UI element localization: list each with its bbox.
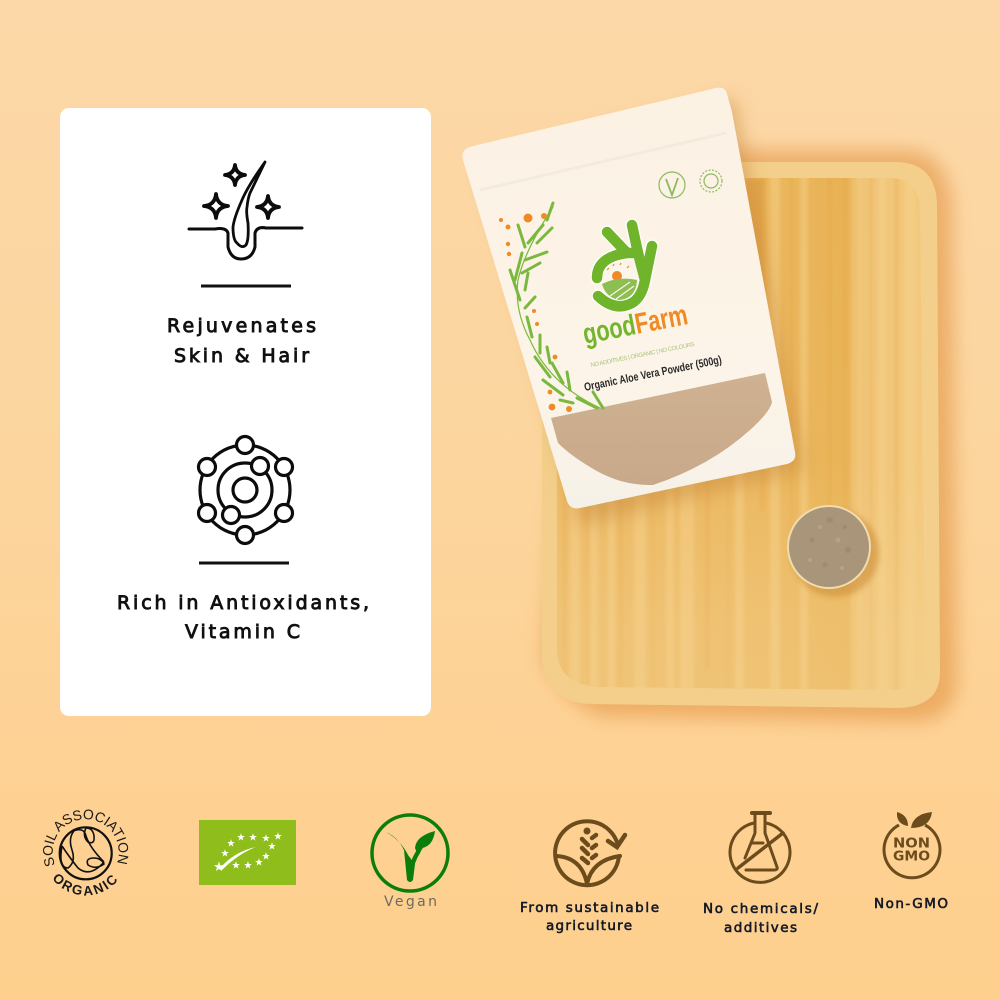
badge: EU organic leaf: ★ — [274, 832, 283, 842]
badge: soil association organic: SOIL ASSOCIATION — [43, 810, 128, 866]
badge: EU organic leaf: ★ — [268, 842, 277, 852]
text: rich in antioxidants: Vitamin C — [185, 621, 300, 643]
powder window — [551, 373, 772, 485]
badge: EU organic leaf: ★ — [213, 859, 225, 874]
pouch brand name: goodFarm — [580, 299, 690, 351]
powder scoop — [787, 505, 879, 597]
pouch leaf decoration — [499, 203, 603, 412]
divider — [199, 562, 289, 564]
pouch tagline: NO ADDITIVES | ORGANIC | NO COLOURS — [590, 342, 695, 369]
badge: EU organic leaf: ★ — [221, 848, 230, 860]
pouch product name: Organic Aloe Vera Powder (500g) — [583, 354, 723, 394]
icon: atom molecule — [198, 436, 292, 544]
badge: vegan — [372, 815, 448, 910]
text: from sustainable agriculture: From sustainable — [520, 900, 659, 916]
text: rejuvenates skin and hair: Rejuvenates — [167, 315, 316, 337]
icon: non GMO — [884, 812, 940, 878]
text: rejuvenates skin and hair: Skin & Hair — [174, 345, 309, 367]
badge: soil association organic — [43, 810, 128, 896]
product pouch — [462, 88, 805, 525]
badge: soil association organic: ORGANIC — [54, 874, 116, 896]
wooden tray — [540, 150, 957, 722]
text: rejuvenates skin and hair — [167, 315, 316, 367]
text: non-GMO: Non-GMO — [874, 896, 948, 912]
badge: EU organic leaf: ★ — [255, 858, 264, 868]
icon: non GMO: NON — [893, 836, 930, 852]
pouch logo: hand — [597, 225, 652, 306]
badge: EU organic leaf: ★ — [232, 860, 241, 872]
text: rich in antioxidants — [117, 592, 369, 643]
panel: benefits card — [60, 108, 431, 716]
text: rich in antioxidants: Rich in Antioxidants, — [117, 592, 369, 614]
text: from sustainable agriculture: agriculture — [546, 918, 632, 934]
text: from sustainable agriculture — [520, 900, 659, 934]
pouch vegan and organic marks — [659, 170, 722, 198]
icon: no chemicals flask — [730, 813, 790, 882]
divider — [201, 284, 291, 288]
badge: EU organic leaf: ★ — [244, 860, 253, 872]
badge: EU organic leaf: ★ — [249, 832, 258, 844]
text: no chemicals additives: No chemicals/ — [703, 901, 818, 917]
icon: non GMO: GMO — [893, 848, 930, 864]
badge: EU organic leaf — [199, 820, 296, 885]
badge: EU organic leaf: ★ — [262, 852, 271, 862]
icon: sustainable agriculture — [555, 821, 625, 885]
text: no chemicals additives: additives — [724, 920, 797, 936]
badge: vegan: Vegan — [384, 894, 437, 910]
badge: EU organic leaf: ★ — [227, 838, 236, 850]
badge: EU organic leaf: ★ — [262, 834, 271, 844]
text: no chemicals additives — [703, 901, 818, 936]
icon: hair follicle — [189, 162, 302, 259]
badge: EU organic leaf: ★ — [237, 832, 246, 844]
